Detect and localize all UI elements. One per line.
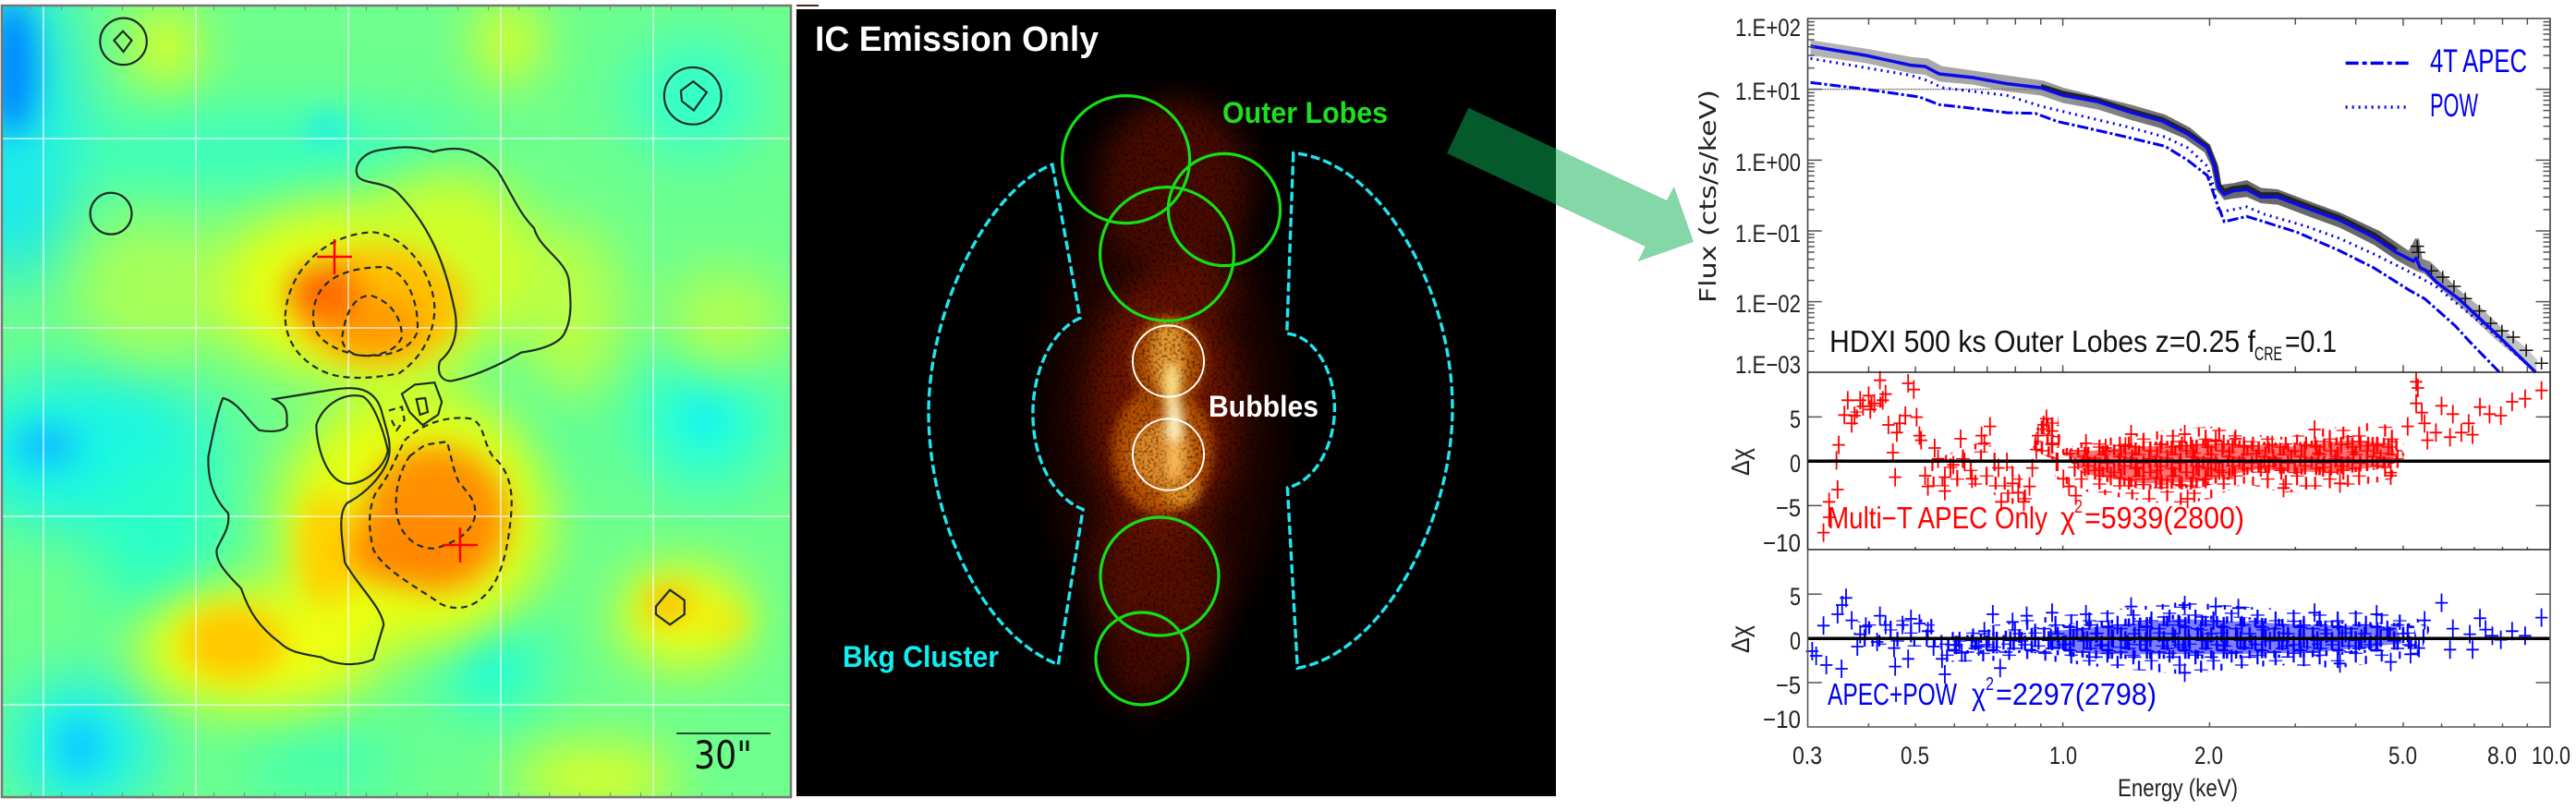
annotation: observation parameters: CRE xyxy=(2254,344,2282,365)
y tick labels: 5 xyxy=(1790,583,1801,611)
bright central jet xyxy=(1164,362,1184,481)
y-axis tick labels: 1.E+02 xyxy=(1735,14,1801,42)
annotation: observation parameters: HDXI 500 ks Outer Lobes z=0.25 f xyxy=(1829,324,2256,358)
map colour field xyxy=(0,0,772,811)
fit statistic label: χ xyxy=(2060,501,2075,535)
y tick labels: −5 xyxy=(1776,494,1801,522)
y-axis title: Δχ xyxy=(1726,448,1755,476)
zero line xyxy=(1807,637,2550,640)
x-axis tick labels: 0.3 xyxy=(1792,742,1822,769)
y tick labels: −5 xyxy=(1776,672,1801,699)
fit statistic label: APEC+POW xyxy=(1828,677,1958,711)
map edge ticks xyxy=(0,7,791,795)
panel: APEC-only residuals xyxy=(1726,371,2550,557)
white bubble regions xyxy=(1133,325,1204,490)
y tick labels: 0 xyxy=(1790,450,1801,478)
yellow field xyxy=(78,0,788,808)
y tick labels: −10 xyxy=(1763,706,1801,733)
blue residual points xyxy=(1806,588,2550,727)
orange field xyxy=(181,247,744,679)
axes frame xyxy=(1807,372,2550,550)
arrow xyxy=(1447,108,1694,261)
ticks on residual axes xyxy=(1807,417,2550,550)
x-axis tick labels: 8.0 xyxy=(2487,742,2517,769)
y-axis title: Flux (cts/s/keV) xyxy=(1695,90,1721,303)
POW model curve xyxy=(1811,58,2536,372)
y tick labels: 0 xyxy=(1790,627,1801,655)
y tick labels: −10 xyxy=(1763,529,1801,557)
scale bar: 30" xyxy=(694,732,752,778)
x-axis tick labels: 2.0 xyxy=(2194,742,2223,769)
red residual points xyxy=(1807,371,2550,550)
spectrum data, errors and models xyxy=(1807,18,2550,372)
y-axis title: Δχ xyxy=(1726,625,1755,653)
fit statistic label: Multi−T APEC Only xyxy=(1828,501,2047,535)
fit statistic label: 2 xyxy=(1986,674,1994,695)
fit statistic label xyxy=(1828,674,2157,711)
heading: IC Emission Only: IC Emission Only xyxy=(815,20,1099,59)
fit statistic label xyxy=(1828,497,2244,535)
fit statistic label: 2 xyxy=(2074,497,2083,517)
y-axis tick labels: 1.E+01 xyxy=(1735,78,1801,105)
blue core field xyxy=(0,0,723,772)
label: Outer Lobes: Outer Lobes xyxy=(1222,96,1388,129)
panel: spectrum chart xyxy=(1695,14,2550,379)
fit statistic label: χ xyxy=(1972,677,1986,711)
gridline at 10 xyxy=(1807,89,2041,91)
panel: APEC+POW residuals xyxy=(1726,550,2550,733)
4T APEC model curve xyxy=(1811,82,2499,372)
label: Bubbles: Bubbles xyxy=(1209,390,1318,423)
emission speckle xyxy=(1048,92,1275,708)
x-axis title: Energy (keV) xyxy=(2118,774,2238,802)
dark data trace xyxy=(2041,86,2397,250)
y-axis tick labels: 1.E+00 xyxy=(1735,149,1801,176)
annotation: observation parameters: =0.1 xyxy=(2285,324,2337,358)
y-axis tick labels: 1.E−03 xyxy=(1735,351,1801,379)
green outer-lobe regions xyxy=(1063,96,1281,705)
x-axis tick labels: 1.0 xyxy=(2049,742,2077,769)
y-axis tick labels xyxy=(1735,14,1801,379)
panel: radio/X-ray colour map xyxy=(0,0,791,811)
emission glow xyxy=(1045,98,1281,706)
legend labels: 4T APEC xyxy=(2430,43,2527,79)
x-axis tick labels xyxy=(1792,742,2570,769)
legend labels xyxy=(2430,43,2527,124)
fit statistic label: =5939(2800) xyxy=(2084,501,2244,535)
legend labels: POW xyxy=(2430,88,2478,124)
panel corner mark xyxy=(796,5,819,6)
y-axis tick labels: 1.E−01 xyxy=(1735,220,1801,248)
legend lines xyxy=(2346,63,2412,107)
y tick labels: 5 xyxy=(1790,406,1801,433)
radio contours xyxy=(91,18,722,664)
label: Bkg Cluster: Bkg Cluster xyxy=(843,640,999,673)
ticks on residual axes xyxy=(1807,594,2550,727)
total model curve xyxy=(1811,46,2536,372)
y-axis tick labels: 1.E−02 xyxy=(1735,290,1801,318)
zero line xyxy=(1807,460,2550,463)
fit statistic label: =2297(2798) xyxy=(1996,677,2157,711)
spectrum frame xyxy=(1807,18,2550,372)
x-axis tick labels: 5.0 xyxy=(2388,742,2417,769)
map grid lines xyxy=(2,6,791,797)
cyan background cluster regions xyxy=(929,153,1452,668)
y tick labels xyxy=(1763,406,1801,557)
error band xyxy=(1811,40,2537,372)
map frame xyxy=(2,6,791,797)
axes frame xyxy=(1807,550,2550,727)
x-axis tick labels: 0.5 xyxy=(1901,742,1929,769)
data crosses xyxy=(2411,240,2548,369)
y tick labels xyxy=(1763,583,1801,733)
axis ticks xyxy=(1807,18,2550,372)
red crosses xyxy=(317,239,478,563)
panel: IC emission image xyxy=(796,6,1556,796)
